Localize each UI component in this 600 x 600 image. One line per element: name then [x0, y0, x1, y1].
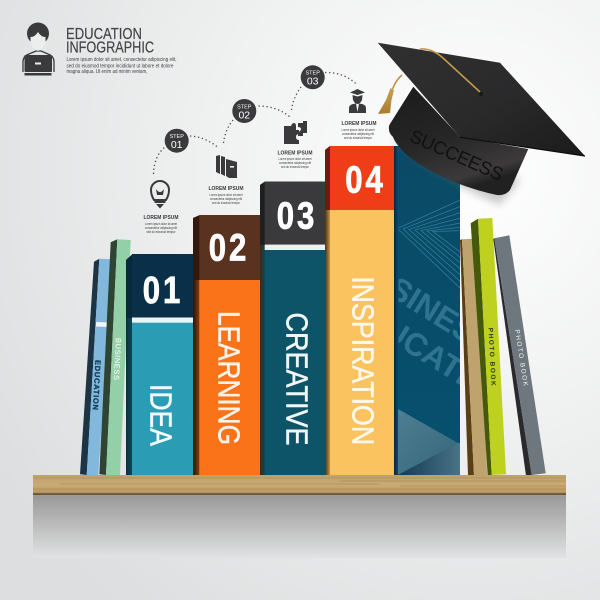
step 02 badge: STEP — [237, 104, 252, 110]
label: LOREM IPSUM — [144, 215, 179, 221]
step 03 badge: 03 — [307, 76, 319, 88]
description: sed do eiusmod tempor — [281, 165, 310, 169]
cover triangles — [398, 409, 458, 475]
book: gray photo book: PHOTO BOOK — [513, 329, 529, 387]
description — [278, 157, 312, 169]
description: consectetur adipiscing elit — [342, 132, 374, 136]
step 01 badge: STEP — [170, 134, 184, 140]
cover spine — [394, 146, 398, 475]
description: Lorem ipsum dolor sit amet — [145, 222, 177, 226]
step 02 badge — [232, 99, 256, 123]
book: lime photo book: PHOTO BOOK — [486, 328, 497, 386]
book: business (tilted green) — [99, 239, 131, 475]
description — [342, 128, 375, 140]
book: business (tilted green): BUSINESS — [112, 338, 123, 380]
item: idea — [144, 181, 179, 234]
label: LOREM IPSUM — [342, 121, 377, 127]
description: sed do eiusmod tempor — [344, 136, 373, 140]
book 04: inspiration — [325, 146, 394, 475]
tassel — [378, 75, 402, 114]
cord — [420, 49, 480, 92]
description: Lorem ipsum dolor sit amet — [210, 193, 243, 197]
intro text — [66, 57, 176, 75]
book: tan — [460, 239, 487, 475]
book 02: learning — [193, 215, 261, 475]
number: 03 — [277, 196, 317, 237]
item: inspiration — [342, 89, 377, 140]
step path: dotted connectors — [154, 72, 358, 174]
description: consectetur adipiscing elit — [210, 197, 242, 201]
cap shadow — [392, 138, 520, 205]
icon: student with laptop — [23, 22, 54, 76]
icon: light bulb — [151, 181, 169, 208]
cap label: SUCCEESS — [407, 125, 507, 185]
step 03 badge: STEP — [306, 71, 320, 77]
number: 02 — [209, 228, 249, 269]
header — [23, 22, 176, 76]
mortarboard — [378, 43, 585, 156]
book: education (tilted blue): EDUCATION — [91, 360, 103, 410]
intro text: magna aliqua. Ut enim ad minim veniam, — [66, 69, 148, 75]
step 03 badge — [301, 65, 325, 89]
icon: graduate — [349, 89, 366, 113]
number: 04 — [345, 160, 386, 201]
intro text: sed do eiusmod tempor incididunt ut labore et dolore — [66, 64, 174, 70]
label: INSPIRATION — [346, 276, 381, 445]
cover title: EDUCATION — [339, 287, 517, 417]
item: creative — [278, 121, 313, 169]
shelf — [33, 475, 566, 495]
label: LOREM IPSUM — [208, 186, 244, 192]
description: Lorem ipsum dolor sit amet — [278, 157, 312, 161]
title: EDUCATION — [66, 26, 142, 43]
description: consectetur adipiscing elit — [279, 161, 311, 165]
label: LOREM IPSUM — [278, 150, 313, 156]
cover title: BUSINESS — [343, 245, 501, 362]
cap base — [389, 87, 528, 195]
step 01 badge — [165, 129, 189, 153]
book: patterned navy cover — [394, 146, 460, 475]
shelf shadow — [33, 495, 566, 558]
step 01 badge: 01 — [171, 139, 183, 151]
label: CREATIVE — [280, 312, 315, 446]
item: learning — [208, 155, 244, 205]
subtitle: INFOGRAPHIC — [66, 40, 154, 56]
description: Lorem ipsum dolor sit amet — [342, 128, 375, 132]
graduation cap — [378, 43, 585, 205]
book: education (tilted blue) — [80, 259, 112, 475]
book: lime photo book — [471, 218, 506, 475]
description: consectetur adipiscing elit — [145, 226, 177, 230]
label: IDEA — [144, 384, 179, 446]
description: sed do eiusmod tempor — [212, 201, 241, 205]
description: sed do eiusmod tempor — [146, 230, 176, 234]
book: gray photo book — [493, 235, 546, 476]
book 01: idea — [126, 254, 195, 475]
description — [145, 222, 177, 234]
description — [210, 193, 243, 205]
number: 01 — [143, 270, 183, 312]
step 02 badge: 02 — [238, 109, 250, 121]
book 03: creative — [260, 182, 327, 475]
cover title — [398, 278, 460, 385]
icon: books — [216, 155, 237, 178]
icon: puzzle — [284, 121, 307, 144]
intro text: Lorem ipsum dolor sit amet, consectetur adipiscing elit, — [66, 57, 176, 63]
chevron pattern — [398, 200, 460, 288]
label: LEARNING — [212, 311, 247, 445]
